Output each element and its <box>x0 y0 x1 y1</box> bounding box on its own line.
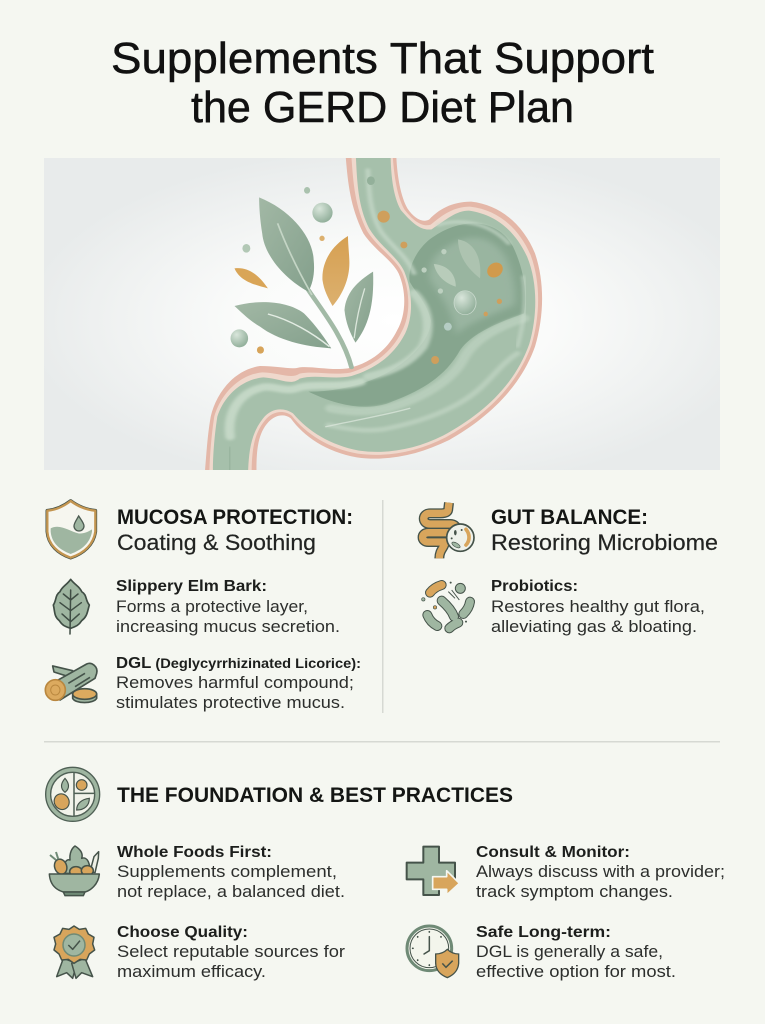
text: dgl: stimulates protective mucus. <box>116 693 345 712</box>
icon: elm leaf <box>53 579 89 634</box>
floating droplets <box>231 187 333 354</box>
text: choose quality: Select reputable sources for <box>117 942 345 961</box>
stomach inner band <box>209 158 538 471</box>
icon: probiotics <box>422 582 470 628</box>
text: consult and monitor: Always discuss with a provider; <box>476 862 725 881</box>
icon: licorice root <box>45 663 97 703</box>
title: the GERD Diet Plan <box>191 83 574 132</box>
title: Supplements That Support <box>111 34 654 83</box>
text: safe long-term <box>476 924 676 981</box>
icon: shield with drop <box>47 501 95 558</box>
text: probiotics: alleviating gas & bloating. <box>491 617 697 636</box>
section: gut balance <box>422 503 718 636</box>
text: slippery elm bark: Slippery Elm Bark: <box>116 578 267 595</box>
text: probiotics: Probiotics: <box>491 578 578 595</box>
heading: mucosa protection: Coating & Soothing <box>117 530 316 555</box>
icon: clock with shield <box>407 926 459 978</box>
heading: foundation: THE FOUNDATION & BEST PRACTICES <box>117 784 513 807</box>
text: slippery elm bark <box>116 578 340 636</box>
icon: medical cross with arrow <box>407 847 459 895</box>
icon: salad bowl <box>49 846 99 896</box>
text: choose quality <box>117 924 345 981</box>
text: slippery elm bark: increasing mucus secretion. <box>116 617 340 636</box>
stomach lumen <box>308 223 525 407</box>
text: consult and monitor <box>476 844 725 901</box>
icon: plate <box>46 767 100 821</box>
icon: intestine with microbes <box>423 503 474 558</box>
heading: gut balance <box>491 506 718 555</box>
heading: mucosa protection: MUCOSA PROTECTION: <box>117 506 353 529</box>
text: dgl: Removes harmful compound; <box>116 673 354 692</box>
text: safe long-term: Safe Long-term: <box>476 924 611 941</box>
inner bubbles and seeds <box>367 176 505 364</box>
heading: gut balance: Restoring Microbiome <box>491 530 718 555</box>
text: dgl: DGL (Deglycyrrhizinated Licorice): <box>116 655 361 672</box>
inner leaves <box>434 239 480 287</box>
text: slippery elm bark: Forms a protective layer, <box>116 597 308 616</box>
horizontal divider <box>44 741 720 742</box>
text: whole foods first <box>117 844 345 901</box>
text: consult and monitor: Consult & Monitor: <box>476 844 630 861</box>
vertical divider <box>382 500 384 713</box>
stomach folds <box>229 170 525 471</box>
herb sprig <box>234 197 373 367</box>
text: probiotics: Restores healthy gut flora, <box>491 597 705 616</box>
text: choose quality: maximum efficacy. <box>117 962 266 981</box>
heading: mucosa protection <box>117 506 353 555</box>
text: whole foods first: Supplements complement, <box>117 862 337 881</box>
text: whole foods first: not replace, a balanced diet. <box>117 882 345 901</box>
panel: stomach illustration <box>44 158 720 471</box>
icon: quality badge <box>54 926 95 978</box>
section: foundation and best practices <box>46 767 725 981</box>
text: safe long-term: effective option for most. <box>476 962 676 981</box>
text: dgl <box>116 655 361 712</box>
text: whole foods first: Whole Foods First: <box>117 844 272 861</box>
title <box>111 34 654 132</box>
text: safe long-term: DGL is generally a safe, <box>476 942 663 961</box>
stomach wall <box>205 158 542 471</box>
text: choose quality: Choose Quality: <box>117 924 248 941</box>
stomach body <box>213 158 535 471</box>
text: probiotics <box>491 578 705 636</box>
heading: gut balance: GUT BALANCE: <box>491 506 648 529</box>
section: mucosa protection <box>45 501 361 712</box>
text: consult and monitor: track symptom changes. <box>476 882 673 901</box>
